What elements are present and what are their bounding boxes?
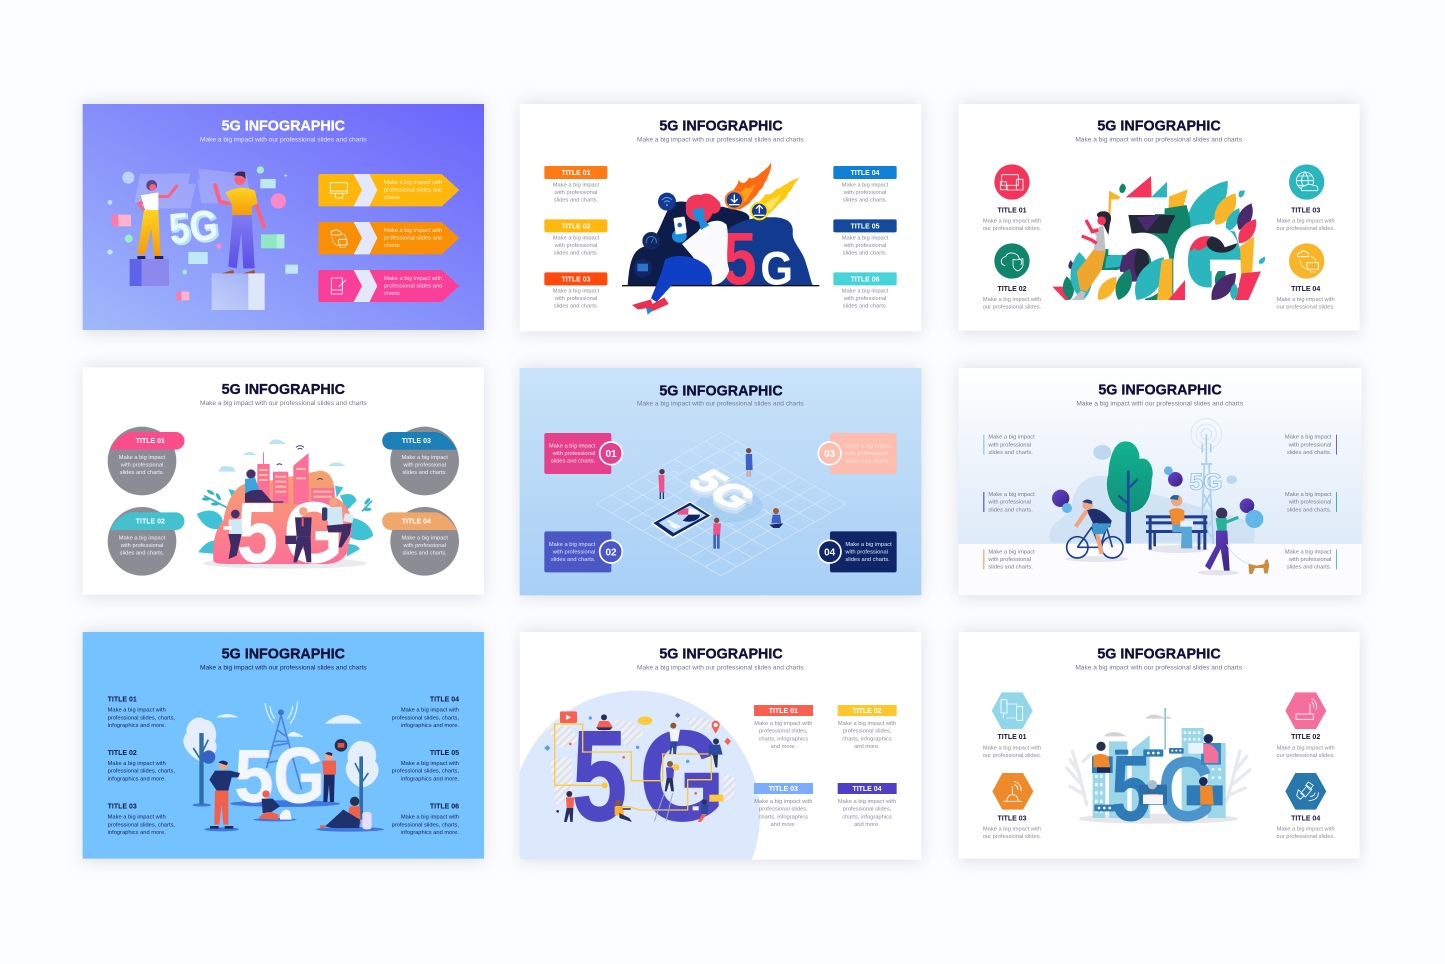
item: title 04 circle: with professional: [402, 543, 446, 549]
arrow item 1: Make a big impact with: [384, 180, 442, 186]
item: title 01: professional slides,: [759, 729, 808, 735]
item: title 04: [838, 783, 897, 828]
item: title 03 with globe icon: TITLE 03: [1291, 207, 1320, 214]
icon: cloud transfer: [331, 230, 347, 247]
left text items: with professional: [987, 442, 1031, 448]
item: title 01: and more.: [770, 744, 797, 750]
item: title 03 circle: slides and charts.: [402, 470, 447, 476]
illustration: 5G with circuit lines: [544, 705, 736, 848]
item: title 01 with devices icon: Make a big impact with: [983, 218, 1041, 224]
item: box 01: 01: [605, 449, 617, 460]
illustration: blue 5G city: G: [1158, 739, 1216, 841]
item: title 03: professional slides,: [759, 807, 808, 813]
illustration: cyclist, bench, walker, tower: [1049, 419, 1269, 575]
right text items: [1285, 435, 1337, 571]
item: title 04: charts, infographics: [842, 814, 892, 820]
people: [1092, 756, 1113, 773]
item: title 02 circle: with professional: [120, 543, 163, 549]
right text items: TITLE 06: [430, 804, 459, 811]
item: title 03 with globe icon: [1276, 164, 1335, 232]
item: title 02 hexagon: Make a big impact with: [1277, 745, 1335, 751]
item: title 06: TITLE 06: [850, 276, 880, 283]
item: title 05: TITLE 05: [850, 223, 880, 230]
item: title 04: TITLE 04: [852, 786, 882, 793]
item: title 02 with shield icon: our professional slides.: [983, 305, 1042, 311]
item: box 04: [818, 531, 897, 572]
panel: slide 2 titles and flames: [520, 104, 921, 331]
left text items: TITLE 01: [108, 696, 137, 703]
item: title 02 hexagon: TITLE 02: [1291, 734, 1320, 741]
item: title 01: TITLE 01: [561, 170, 591, 177]
subheading: Make a big impact with our professional slides and charts: [1076, 401, 1244, 408]
item: box 01: slides and charts.: [551, 459, 596, 465]
item: title 04 hexagon: TITLE 04: [1291, 815, 1320, 822]
left text items: Make a big impact: [988, 492, 1035, 498]
item: title 02 circle: TITLE 02: [136, 518, 165, 525]
item: title 06: with professional: [843, 296, 886, 302]
right text items: TITLE 05: [430, 750, 459, 757]
illustration: 5G tower with people: 5: [235, 734, 274, 818]
right text items: slides and charts.: [1287, 450, 1332, 456]
right text items: professional slides, charts,: [392, 822, 459, 828]
people: [601, 714, 607, 720]
item: title 02 circle: [108, 507, 184, 576]
arrow item 1: charts: [384, 195, 400, 201]
item: title 04: professional slides,: [843, 807, 892, 813]
item: title 03 hexagon: our professional slides.: [983, 834, 1042, 840]
left text items: Make a big impact with: [108, 761, 166, 767]
item: title 04: Make a big impact: [842, 183, 889, 189]
right text items: Make a big impact with: [401, 761, 459, 767]
item: title 03: slides and charts.: [554, 304, 599, 310]
right text items: professional slides, charts,: [392, 769, 459, 775]
item: box 03: with professional: [844, 451, 888, 457]
item: title 03: TITLE 03: [769, 786, 798, 793]
item: title 02 hexagon: our professional slides.: [1276, 753, 1335, 759]
item: title 02: and more.: [854, 744, 880, 750]
left text items: TITLE 03: [108, 804, 137, 811]
item: title 03 circle: TITLE 03: [402, 438, 431, 445]
item: title 06: slides and charts.: [843, 304, 888, 310]
item: title 03 with globe icon: Make a big impact with: [1277, 218, 1335, 224]
right text items: infographics and more.: [401, 776, 459, 782]
panel: slide 6 park scene: [958, 368, 1362, 595]
illustration: people with 5G: 5G: [168, 202, 222, 255]
right text items: Make a big impact: [1285, 492, 1332, 498]
panel: slide 4 city circles: [83, 367, 484, 595]
illustration: isometric 5G: 5G: [678, 466, 767, 518]
left text items: with professional: [987, 557, 1031, 563]
right text items: Make a big impact: [1285, 435, 1332, 441]
illustration: woman with phone: 5: [723, 216, 757, 300]
item: title 04 circle: slides and charts.: [402, 550, 447, 556]
item: box 03: [818, 433, 897, 474]
item: title 01: with professional: [554, 190, 597, 196]
illustration: leaves with white 5G: G: [1170, 202, 1245, 322]
item: box 02: [544, 531, 622, 572]
item: box 03: slides and charts.: [845, 459, 890, 465]
panel: slide 9 hexagons: [958, 632, 1360, 859]
left text items: slides and charts.: [988, 507, 1033, 513]
left text items: Make a big impact with: [108, 815, 166, 821]
illustration: leaves with white 5G: 5: [1102, 169, 1173, 329]
woman: [1097, 211, 1111, 235]
right text items: professional slides, charts,: [392, 715, 459, 721]
heading: 5G INFOGRAPHIC: [1098, 382, 1222, 399]
item: title 02 hexagon: [1276, 692, 1335, 759]
item: title 01: TITLE 01: [769, 708, 798, 715]
item: title 02: TITLE 02: [561, 223, 591, 230]
right text items: infographics and more.: [401, 723, 459, 729]
item: title 02 with shield icon: Make a big impact with: [983, 297, 1041, 303]
people: [246, 469, 256, 479]
left text items: slides and charts.: [988, 565, 1033, 571]
arrow item 2: [318, 222, 459, 254]
subheading: Make a big impact with our professional slides and charts: [1075, 136, 1243, 143]
left text items: with professional: [987, 500, 1031, 506]
left text items: professional slides, charts,: [108, 769, 175, 775]
panel: slide 8 purple 5G circle: [520, 632, 922, 860]
item: title 05: [833, 219, 897, 257]
item: title 04 circle: Make a big impact: [401, 535, 448, 541]
background circle: [520, 690, 760, 860]
item: title 01 with devices icon: TITLE 01: [997, 207, 1027, 214]
heading: 5G INFOGRAPHIC: [659, 382, 783, 399]
item: title 06: Make a big impact: [842, 289, 889, 295]
heading: 5G INFOGRAPHIC: [1097, 646, 1221, 663]
arrow item 2: Make a big impact with: [384, 228, 442, 234]
illustration: 5G tower with people: G: [274, 731, 326, 820]
arrow item 3: charts: [384, 291, 400, 297]
item: title 01 hexagon: [983, 692, 1042, 759]
subheading: Make a big impact with our professional slides and charts: [1075, 665, 1243, 672]
man: [215, 185, 264, 227]
left text items: infographics and more.: [108, 830, 166, 836]
heading: 5G INFOGRAPHIC: [659, 118, 783, 135]
item: title 04: TITLE 04: [850, 170, 880, 177]
left text items: TITLE 02: [108, 750, 137, 757]
item: title 04: with professional: [843, 190, 886, 196]
illustration: blue 5G city: 5: [1111, 736, 1151, 840]
item: title 01: charts, infographics: [759, 736, 808, 742]
illustration: 5G tower with people: [183, 701, 384, 832]
item: box 03: Make a big impact: [845, 444, 892, 450]
item: title 04 hexagon: Make a big impact with: [1277, 826, 1335, 832]
item: box 01: [544, 433, 622, 474]
heading: 5G INFOGRAPHIC: [222, 118, 345, 135]
item: box 02: 02: [605, 547, 617, 558]
item: title 03: Make a big impact with: [754, 799, 812, 805]
item: title 02: Make a big impact: [553, 236, 600, 242]
item: title 03: with professional: [554, 296, 597, 302]
item: title 02 circle: slides and charts.: [120, 550, 165, 556]
item: title 01 hexagon: Make a big impact with: [983, 745, 1041, 751]
item: title 03: and more.: [770, 822, 797, 828]
panel: slide 7 sky blue tower: [83, 632, 484, 859]
item: title 01: Make a big impact with: [754, 721, 812, 727]
item: box 04: Make a big impact: [845, 542, 892, 548]
item: title 03: charts, infographics: [759, 814, 808, 820]
item: title 03: Make a big impact: [553, 289, 600, 295]
item: title 01 circle: with professional: [120, 462, 163, 468]
left text items: slides and charts.: [988, 450, 1033, 456]
right text items: Make a big impact with: [401, 815, 459, 821]
item: title 04 with transfer icon: our professional slides.: [1276, 305, 1335, 311]
subheading: Make a big impact with our professional slides and charts: [200, 400, 367, 407]
item: title 02: slides and charts.: [554, 251, 599, 257]
left text items: professional slides, charts,: [108, 715, 175, 721]
right text items: slides and charts.: [1287, 565, 1332, 571]
item: title 04 with transfer icon: [1276, 243, 1335, 311]
right text items: [392, 696, 459, 836]
item: title 02: [544, 219, 607, 257]
panel: slide 5 isometric grid: [520, 368, 921, 595]
item: title 04 hexagon: our professional slides.: [1276, 834, 1335, 840]
right text items: Make a big impact: [1285, 549, 1332, 555]
item: title 03 hexagon: [983, 773, 1042, 840]
item: title 02: [838, 705, 897, 750]
arrow item 1: [318, 174, 459, 206]
illustration: leaves with white 5G: [1052, 169, 1265, 329]
item: title 02 with shield icon: [983, 243, 1042, 311]
item: box 04: slides and charts.: [845, 557, 890, 563]
item: title 03 circle: Make a big impact: [401, 455, 448, 461]
right text items: Make a big impact with: [401, 708, 459, 714]
icon: monitor: [330, 183, 347, 198]
illustration: 5G city with people: G: [283, 483, 343, 581]
illustration: isometric 5G: [596, 432, 846, 576]
right text items: with professional: [1288, 557, 1331, 563]
item: title 02: with professional: [554, 243, 597, 249]
item: title 01 with devices icon: our professional slides.: [983, 226, 1042, 232]
item: title 01 with devices icon: [983, 164, 1042, 232]
arrow item 2: charts: [384, 243, 400, 249]
illustration: cyclist, bench, walker, tower: 5G: [1189, 469, 1223, 496]
illustration: woman with phone: G: [760, 242, 793, 295]
item: title 03: TITLE 03: [561, 276, 591, 283]
item: title 02: professional slides,: [843, 729, 892, 735]
illustration: isometric 5G: 5G: [678, 469, 767, 521]
item: title 01 circle: TITLE 01: [136, 438, 165, 445]
item: title 01: Make a big impact: [553, 183, 600, 189]
panel: slide 3 leaves: [958, 104, 1360, 331]
arrow item 3: Make a big impact with: [384, 276, 442, 282]
item: box 04: 04: [824, 547, 836, 558]
left text items: infographics and more.: [108, 776, 166, 782]
item: title 04: slides and charts.: [843, 198, 888, 204]
woman: [139, 186, 177, 213]
illustration: people with 5G: 5G: [167, 201, 220, 254]
item: title 03 with globe icon: our professional slides.: [1276, 226, 1335, 232]
left text items: professional slides, charts,: [108, 822, 175, 828]
subheading: Make a big impact with our professional slides and charts: [637, 137, 804, 144]
item: title 02 with shield icon: TITLE 02: [997, 286, 1027, 293]
left text items: [983, 435, 1035, 571]
illustration: 5G city with people: 5: [237, 486, 278, 581]
item: title 02 circle: Make a big impact: [119, 535, 166, 541]
illustration: 5G tower with people: G: [273, 730, 325, 819]
item: box 02: Make a big impact: [549, 542, 596, 548]
panel: slide 1 purple arrows: [83, 104, 484, 330]
arrow item 3: professional slides and: [384, 283, 442, 289]
right text items: with professional: [1288, 442, 1331, 448]
illustration: blue 5G city: [1067, 708, 1250, 841]
item: title 03 circle: with professional: [402, 462, 446, 468]
item: title 04 circle: TITLE 04: [402, 518, 431, 525]
item: title 01 hexagon: TITLE 01: [997, 734, 1027, 741]
subheading: Make a big impact with our professional slides and charts: [200, 665, 367, 672]
item: title 01 circle: Make a big impact: [119, 455, 166, 461]
item: title 05: slides and charts.: [843, 251, 888, 257]
subheading: Make a big impact with our professional slides and charts: [637, 401, 804, 408]
item: box 04: with professional: [844, 549, 888, 555]
illustration: people with 5G: [107, 166, 298, 310]
left text items: infographics and more.: [108, 723, 166, 729]
left text items: [108, 696, 175, 836]
item: box 01: with professional: [552, 451, 595, 457]
card shadows: [83, 102, 1361, 862]
item: title 01 hexagon: our professional slides.: [983, 753, 1042, 759]
arrow item 2: professional slides and: [384, 235, 442, 241]
arrow item 1: professional slides and: [384, 187, 442, 193]
item: title 03 circle: [382, 427, 459, 495]
item: title 04: [833, 166, 897, 204]
illustration: isometric 5G: 5G: [678, 463, 767, 515]
item: title 04 circle: [382, 507, 459, 576]
left text items: Make a big impact: [988, 435, 1035, 441]
left text items: Make a big impact with: [108, 708, 166, 714]
heading: 5G INFOGRAPHIC: [659, 646, 783, 663]
left text items: Make a big impact: [988, 549, 1035, 555]
illustration: 5G tower with people: 5: [234, 734, 273, 818]
illustration: 5G with circuit lines: 5: [572, 705, 627, 848]
item: title 01: slides and charts.: [554, 198, 599, 204]
item: box 02: with professional: [552, 549, 595, 555]
item: title 03 hexagon: Make a big impact with: [983, 826, 1041, 832]
heading: 5G INFOGRAPHIC: [222, 646, 345, 663]
item: title 02: charts, infographics: [842, 736, 892, 742]
item: title 01 circle: [108, 427, 184, 495]
heading: 5G INFOGRAPHIC: [222, 381, 345, 398]
item: title 02: TITLE 02: [852, 708, 882, 715]
item: title 04 with transfer icon: Make a big impact with: [1277, 297, 1335, 303]
right text items: with professional: [1288, 500, 1331, 506]
heading: 5G INFOGRAPHIC: [1097, 118, 1221, 135]
item: title 03: [754, 783, 813, 828]
item: box 02: slides and charts.: [551, 557, 596, 563]
icon: tablet and pen: [331, 278, 346, 294]
item: title 01: [544, 166, 607, 204]
item: box 01: Make a big impact: [549, 444, 596, 450]
illustration: 5G city with people: [197, 439, 373, 581]
subheading: Make a big impact with our professional slides and charts: [200, 136, 367, 143]
item: title 04: and more.: [854, 822, 880, 828]
arrow item 3: [318, 270, 459, 302]
illustration: woman with phone: [622, 163, 819, 315]
item: title 06: [833, 272, 897, 310]
item: title 04 hexagon: [1276, 773, 1335, 840]
item: title 04 with transfer icon: TITLE 04: [1291, 286, 1320, 293]
item: title 05: Make a big impact: [842, 236, 889, 242]
item: title 01 circle: slides and charts.: [120, 470, 165, 476]
item: title 05: with professional: [843, 243, 886, 249]
item: title 02: Make a big impact with: [838, 721, 896, 727]
item: title 04: Make a big impact with: [838, 799, 896, 805]
item: title 03 hexagon: TITLE 03: [997, 815, 1027, 822]
subheading: Make a big impact with our professional slides and charts: [637, 665, 804, 672]
illustration: 5G with circuit lines: G: [639, 705, 725, 848]
right text items: slides and charts.: [1287, 507, 1332, 513]
right text items: TITLE 04: [430, 696, 459, 703]
item: title 03: [544, 272, 607, 310]
right text items: infographics and more.: [401, 830, 459, 836]
item: title 01: [754, 705, 813, 750]
item: box 03: 03: [824, 449, 836, 460]
